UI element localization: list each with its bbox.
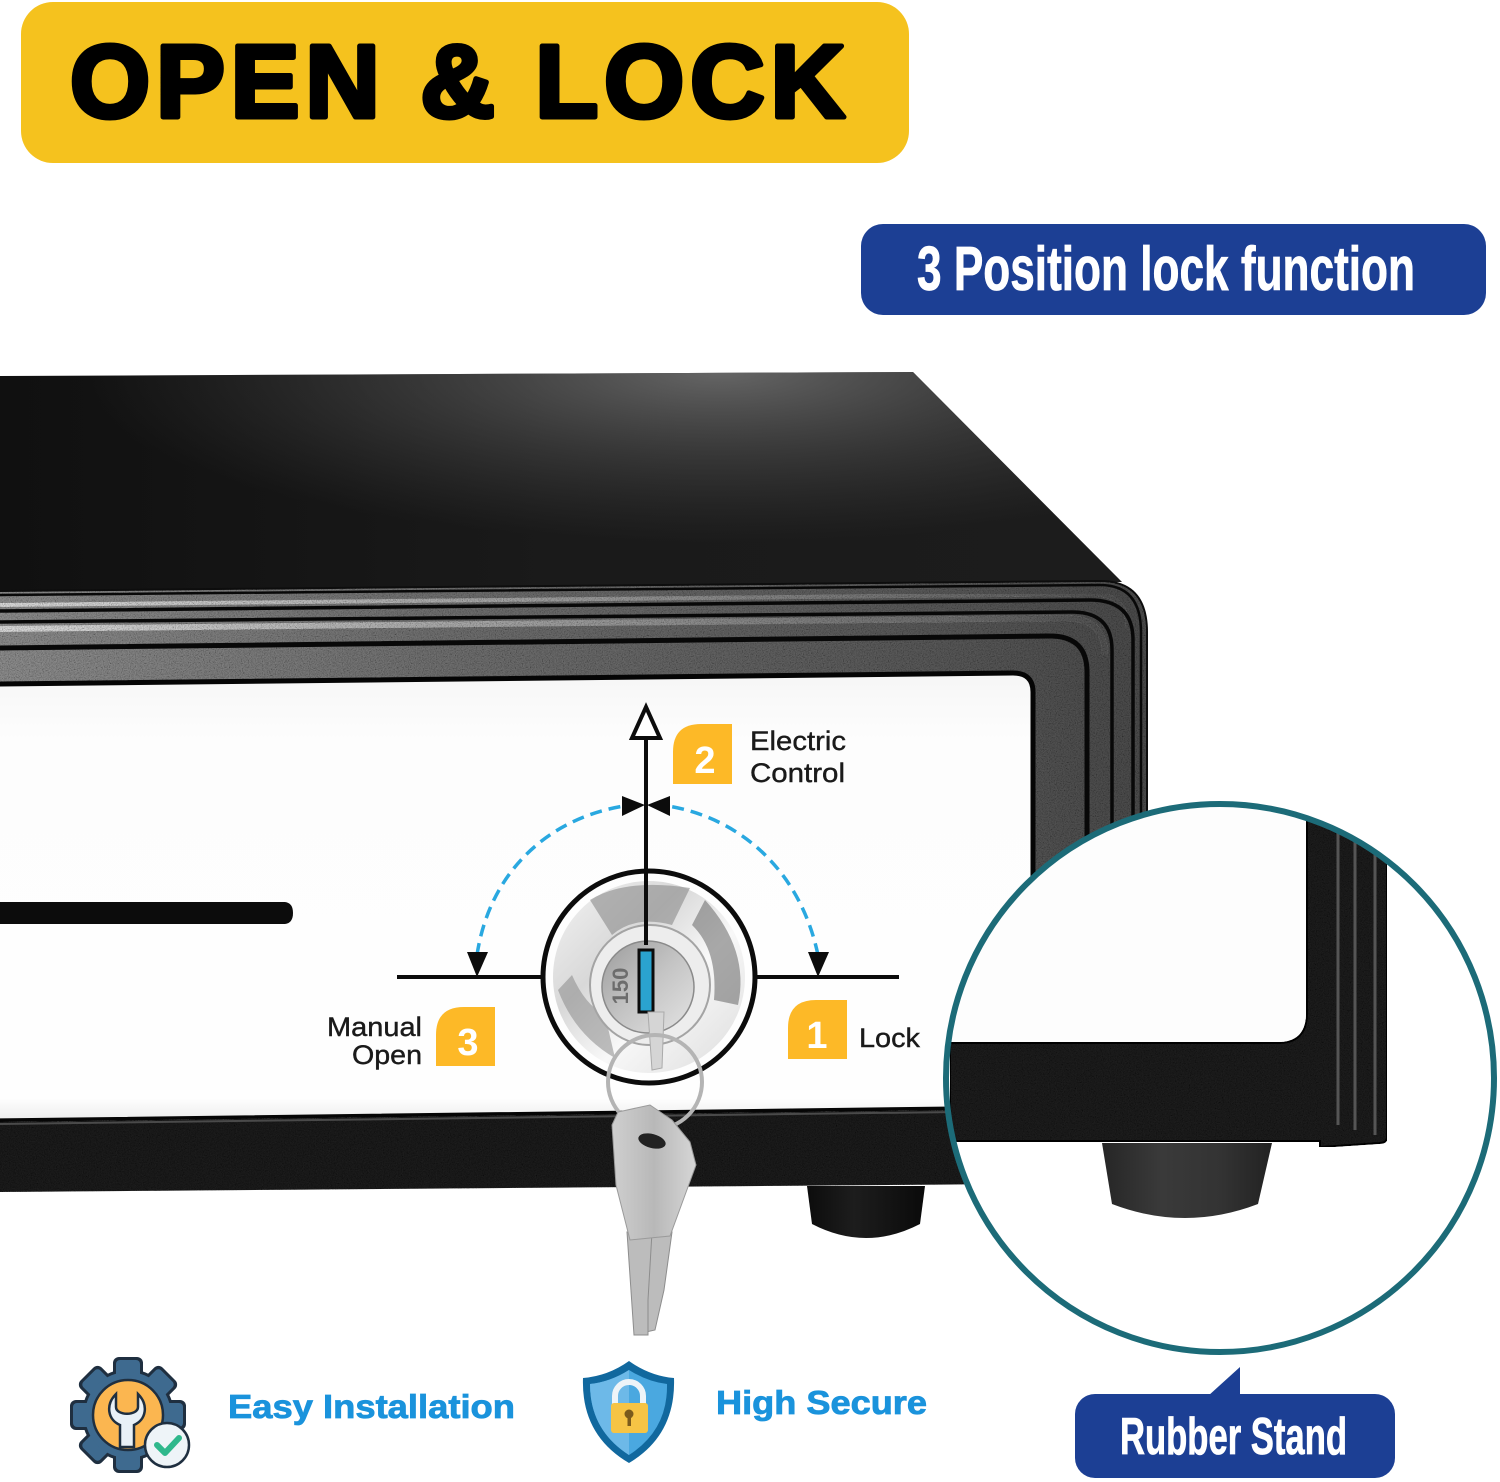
arrow: up to electric control	[632, 707, 660, 945]
label: High Secure: High Secure	[716, 1384, 927, 1421]
label: Lock: Lock	[859, 1023, 921, 1053]
white drawer panel	[0, 673, 1033, 1121]
badge 3: manual open: 3	[457, 1022, 479, 1064]
cash drawer product	[0, 372, 1148, 1238]
title banner: OPEN & LOCK: OPEN & LOCK	[70, 24, 845, 139]
inset black frame	[950, 800, 1387, 1147]
label: Electric Control	[750, 726, 846, 788]
keys on ring	[608, 1012, 702, 1335]
badge 1: lock: 1	[806, 1015, 828, 1057]
badge 2: electric control: 2	[694, 740, 716, 782]
lock ring	[543, 871, 755, 1083]
cash slot	[0, 902, 293, 924]
label: Manual Open: Open	[352, 1040, 422, 1070]
arrowhead: manual open	[467, 952, 488, 977]
badge 3: manual open	[436, 1007, 495, 1066]
inset rubber foot	[1102, 1143, 1272, 1218]
key blades	[627, 1232, 672, 1335]
icon: gear with wrench	[70, 1357, 189, 1473]
position baseline left	[397, 975, 541, 979]
icon: security shield with padlock	[583, 1361, 674, 1463]
inset circle: rubber stand close-up	[930, 800, 1494, 1352]
rubber foot	[807, 1186, 925, 1238]
panel bottom frame band	[0, 1109, 1148, 1192]
arrowhead: lock	[808, 952, 829, 977]
inset ring	[946, 804, 1494, 1352]
callout: Rubber Stand: Rubber Stand	[1120, 1408, 1347, 1466]
label: Electric Control: Control	[750, 758, 845, 788]
label: Easy Installation: Easy Installation	[228, 1388, 515, 1425]
title banner: OPEN & LOCK	[21, 2, 909, 163]
rotation arc right	[668, 806, 818, 955]
lock cylinder: 150	[608, 968, 633, 1004]
position baseline right	[757, 975, 899, 979]
label: Manual Open: Manual	[327, 1012, 422, 1042]
key slot	[639, 950, 653, 1012]
arrowheads at centre	[622, 796, 670, 816]
inset white panel	[930, 800, 1315, 1050]
inset frame ridges	[1338, 800, 1375, 1135]
lock diagram	[327, 707, 921, 1083]
label: 3 Position lock function	[861, 224, 1486, 315]
callout: Rubber Stand	[1075, 1367, 1395, 1478]
key head	[612, 1105, 696, 1240]
lock cylinder	[553, 881, 745, 1073]
rotation arc left	[477, 806, 624, 955]
badge 2: electric control	[673, 724, 732, 784]
label: Manual Open	[327, 1012, 422, 1070]
key hole	[637, 1131, 667, 1151]
drawer top surface	[0, 372, 1122, 592]
drawer front frame	[0, 580, 1148, 1192]
key ring	[608, 1035, 702, 1129]
key stem	[648, 1012, 664, 1070]
label: Electric Control: Electric	[750, 726, 846, 756]
badge 1: lock	[788, 1000, 847, 1059]
